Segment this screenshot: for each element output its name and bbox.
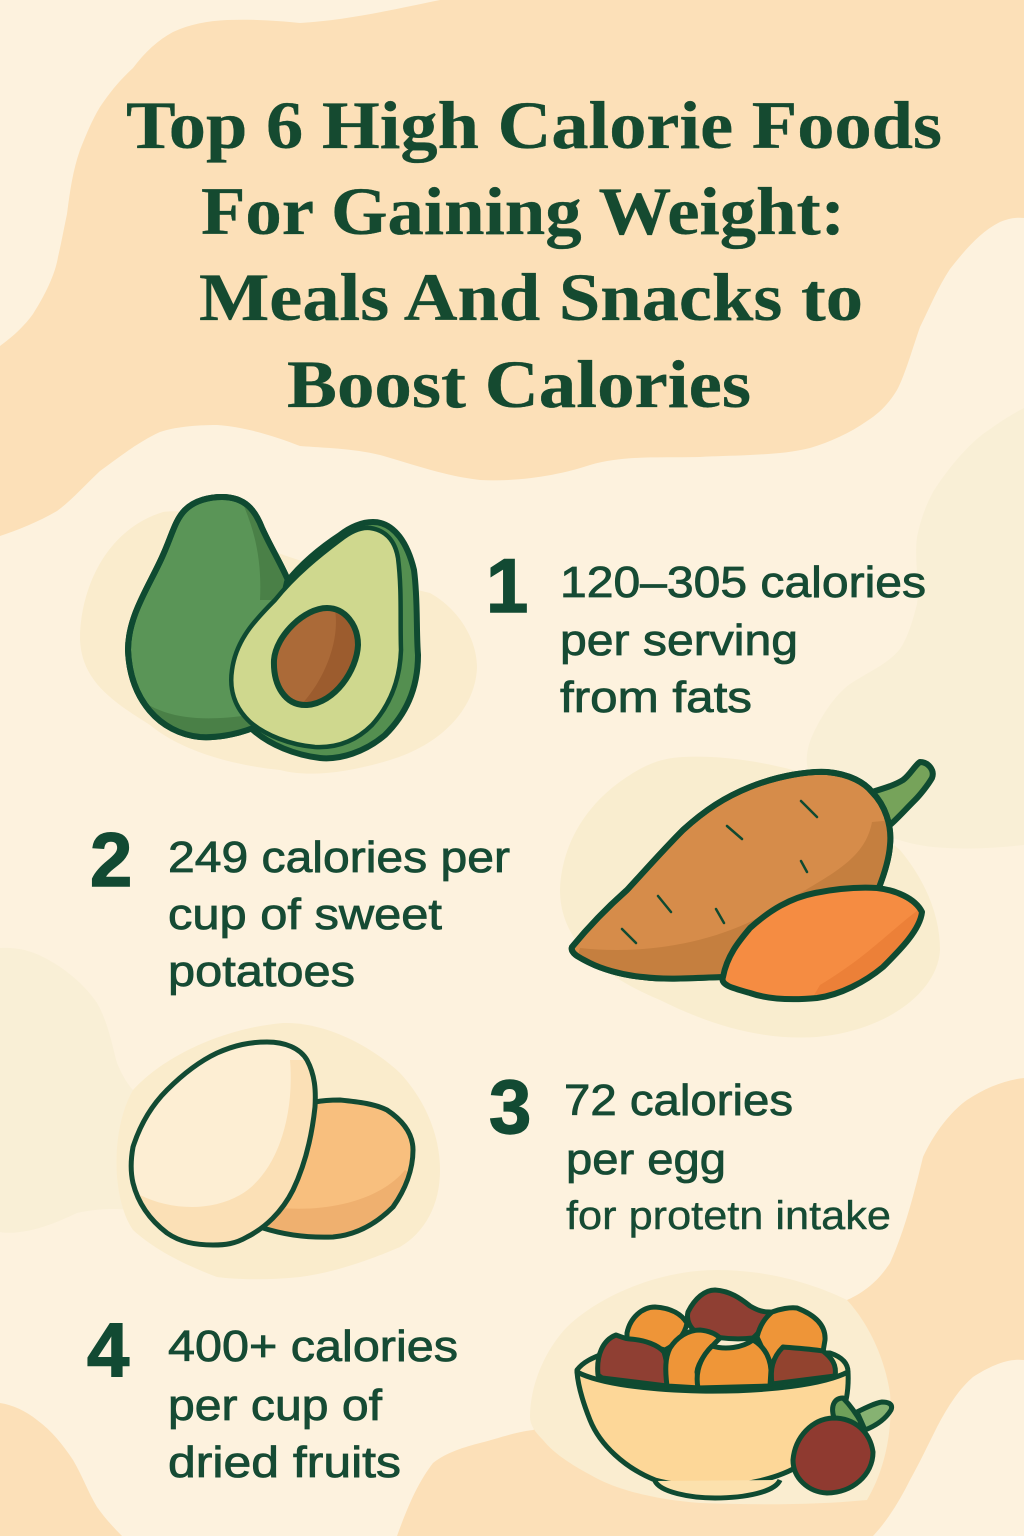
text: item 1 — [560, 558, 926, 722]
title — [126, 87, 942, 422]
text: item 4: dried fruits — [168, 1438, 401, 1487]
text: item 4: 400+ calories — [168, 1322, 458, 1371]
text: item 1: per serving — [560, 616, 798, 665]
text: item 2: potatoes — [168, 947, 355, 996]
text: item 2: cup of sweet — [168, 890, 442, 939]
icon: eggs — [131, 1042, 420, 1250]
number 2: 2 — [90, 818, 132, 903]
text: item 4: per cup of — [168, 1381, 383, 1430]
title: Boost Calories — [287, 346, 751, 422]
number 3: 3 — [489, 1065, 531, 1150]
title: Top 6 High Calorie Foods — [126, 87, 942, 163]
title: For Gaining Weight: — [201, 173, 845, 249]
number 1: 1 — [486, 544, 528, 629]
number 4: 4 — [87, 1308, 129, 1393]
icon: bowl of dried fruit — [577, 1290, 892, 1498]
icon: avocado — [128, 497, 418, 758]
title: Meals And Snacks to — [199, 259, 863, 335]
text: item 1: from fats — [560, 673, 752, 722]
text: item 3: for protetn intake — [566, 1194, 891, 1238]
text: item 3: per egg — [566, 1135, 726, 1184]
text: item 4 — [168, 1322, 458, 1487]
text: item 1: 120–305 calories — [560, 558, 926, 607]
text: item 3: 72 calories — [564, 1076, 793, 1125]
text: item 2 — [168, 833, 510, 996]
icon: sweet potato — [570, 762, 933, 1002]
text: item 3 — [564, 1076, 891, 1238]
text: item 2: 249 calories per — [168, 833, 510, 882]
